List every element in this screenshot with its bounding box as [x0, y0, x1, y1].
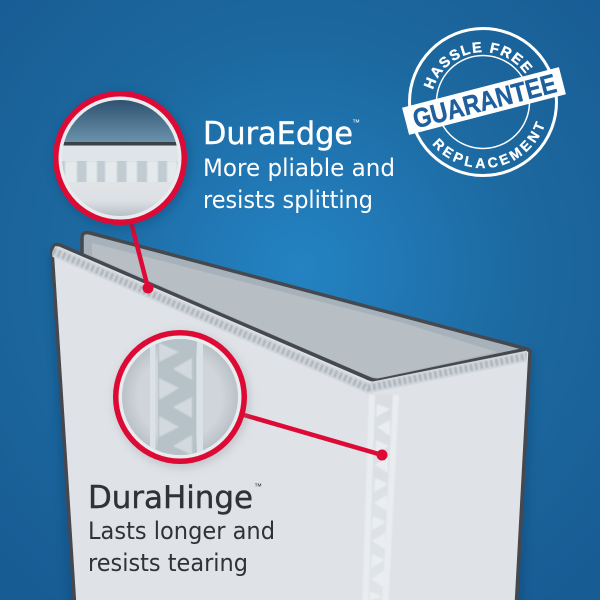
DuraHinge strip — [362, 395, 399, 600]
DuraEdge perforated edge — [53, 251, 528, 388]
DuraHinge magnifier lens — [113, 330, 249, 467]
DuraHinge heading and text — [88, 480, 275, 577]
binder illustration — [50, 233, 533, 600]
front cover — [52, 245, 530, 600]
seal text: bottom arc: REPLACEMENT — [432, 120, 544, 168]
DuraHinge heading and text: DuraHinge — [88, 480, 253, 516]
seal banner: GUARANTEE — [410, 68, 560, 134]
DuraEdge heading and text — [203, 116, 395, 214]
DuraEdge heading and text: ™ — [352, 118, 360, 127]
panel shadow — [50, 250, 533, 600]
DuraHinge heading and text: ™ — [254, 482, 262, 491]
DuraHinge heading and text: resists tearing — [88, 549, 248, 577]
back cover inside — [82, 233, 527, 381]
DuraEdge heading and text: resists splitting — [203, 186, 373, 214]
guarantee seal — [402, 27, 566, 177]
DuraEdge heading and text: More pliable and — [203, 154, 395, 182]
inner lighter area — [92, 243, 497, 378]
seal text: top arc: HASSLE FREE — [424, 42, 533, 90]
DuraEdge magnifier lens — [53, 91, 189, 228]
leader line: DuraHinge — [244, 415, 388, 460]
DuraEdge heading and text: DuraEdge — [203, 116, 353, 152]
leader line: DuraEdge — [131, 222, 154, 294]
DuraHinge heading and text: Lasts longer and — [88, 517, 275, 545]
